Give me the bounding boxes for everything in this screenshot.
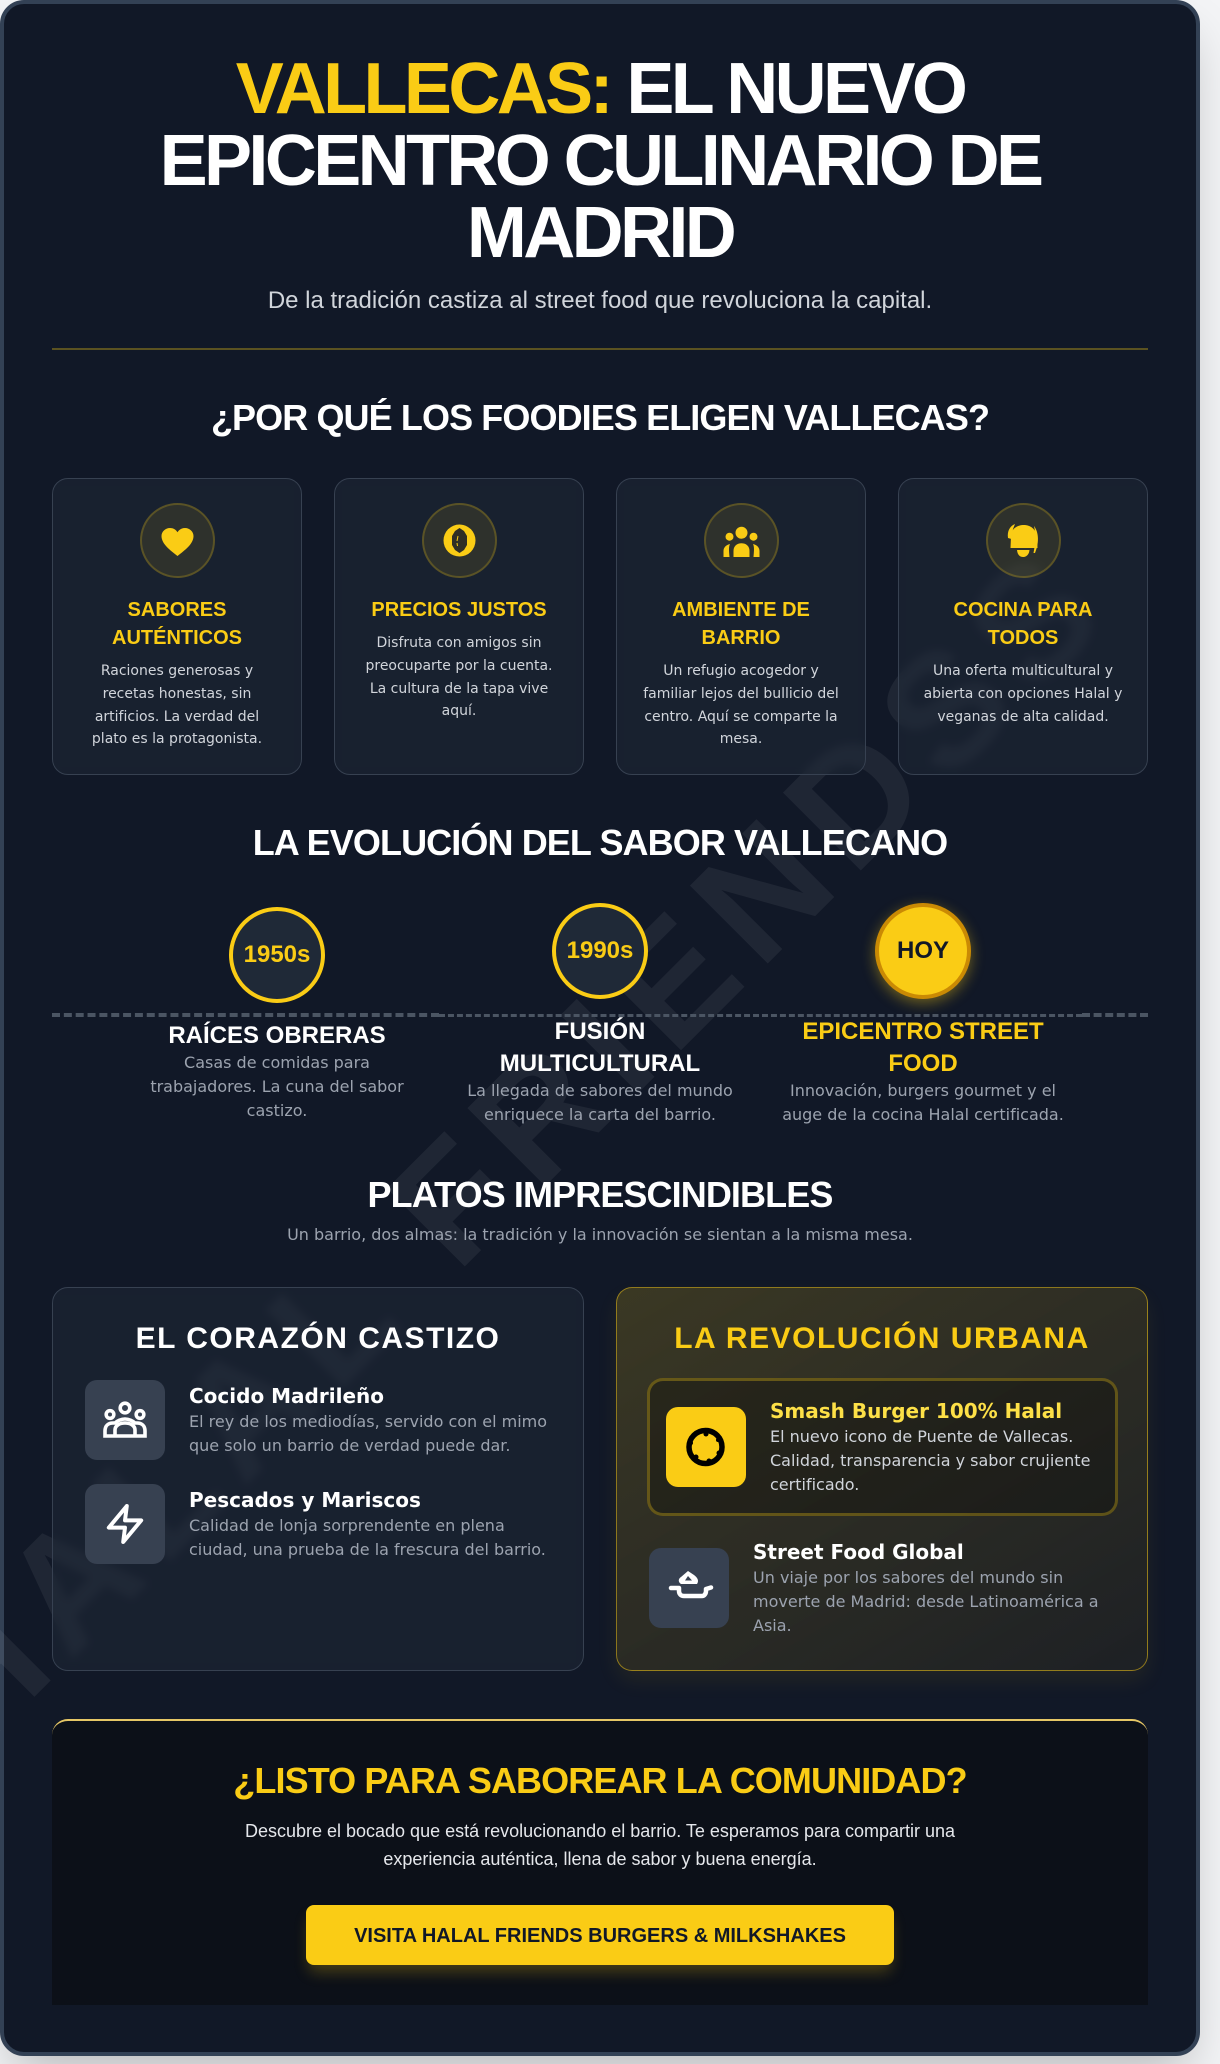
icon: heart <box>140 503 214 578</box>
call to action panel <box>52 1719 1148 2005</box>
title: VALLECAS: EL NUEVO <box>236 49 964 129</box>
card: cocina para todos: Una oferta multicultural y abierta con opciones Halal y veganas de alta calidad. <box>924 663 1122 724</box>
panel: la revolución urbana: LA REVOLUCIÓN URBANA <box>674 1322 1090 1355</box>
timeline node: 1990s <box>552 903 648 999</box>
cta heading: ¿LISTO PARA SABOREAR LA COMUNIDAD? <box>233 1760 967 1801</box>
panel: el corazón castizo <box>52 1287 584 1671</box>
timeline node: hoy <box>875 903 971 999</box>
dish: pescados y mariscos: Calidad de lonja sorprendente en plena ciudad, una prueba de la frescura del barrio. <box>189 1516 546 1559</box>
dish: cocido madrileño: El rey de los mediodías, servido con el mimo que solo un barrio de verdad puede dar. <box>189 1412 547 1455</box>
timeline step: fusión multicultural: FUSIÓN MULTICULTURAL <box>500 1018 700 1077</box>
title: MADRID <box>467 193 733 273</box>
timeline step: fusión multicultural: La llegada de sabores del mundo enriquece la carta del barrio. <box>467 1081 733 1124</box>
card: precios justos <box>334 478 584 775</box>
heading: essential dishes: PLATOS IMPRESCINDIBLES <box>368 1174 832 1215</box>
timeline step: raíces obreras: Casas de comidas para trabajadores. La cuna del sabor castizo. <box>150 1053 404 1120</box>
subtitle: De la tradición castiza al street food que revoluciona la capital. <box>268 287 932 314</box>
timeline step: fusión multicultural <box>467 1017 733 1124</box>
panel: el corazón castizo: EL CORAZÓN CASTIZO <box>136 1322 500 1355</box>
card: cocina para todos: COCINA PARA TODOS <box>954 599 1092 649</box>
title: EPICENTRO CULINARIO DE <box>160 121 1040 201</box>
timeline step: raíces obreras: RAÍCES OBRERAS <box>168 1022 386 1049</box>
featured dish box <box>647 1378 1118 1516</box>
timeline node: hoy: HOY <box>897 937 949 964</box>
panel: la revolución urbana <box>616 1287 1148 1671</box>
cta text: Descubre el bocado que está revolucionando el barrio. Te esperamos para compartir una experiencia auténtica, llena de sabor y buena energía. <box>245 1821 955 1869</box>
dish: street food global: Street Food Global <box>753 1540 964 1564</box>
card: cocina para todos <box>898 478 1148 775</box>
card: ambiente de barrio: Un refugio acogedor y familiar lejos del bullicio del centro. Aquí se comparte la mesa. <box>643 663 839 747</box>
dish: cocido madrileño <box>189 1384 547 1455</box>
dish: cocido madrileño: Cocido Madrileño <box>189 1384 384 1408</box>
timeline node: 1950s <box>229 907 325 1003</box>
timeline step: epicentro street food <box>782 1018 1064 1124</box>
card: ambiente de barrio <box>616 478 866 775</box>
cta button: VISITA HALAL FRIENDS BURGERS & MILKSHAKES <box>354 1925 846 1947</box>
icon: bell <box>986 503 1060 578</box>
card: sabores auténticos: Raciones generosas y recetas honestas, sin artificios. La verdad del plato es la protagonista. <box>92 663 262 747</box>
dish: pescados y mariscos: Pescados y Mariscos <box>189 1488 421 1512</box>
card: precios justos: PRECIOS JUSTOS <box>371 599 547 621</box>
card: sabores auténticos <box>52 478 302 775</box>
dish: smash burger: Smash Burger 100% Halal <box>770 1399 1062 1423</box>
icon: bolt <box>85 1484 165 1564</box>
icon: people <box>704 503 778 578</box>
card: precios justos: Disfruta con amigos sin preocuparte por la cuenta. La cultura de la tapa vive aquí. <box>365 635 552 719</box>
icon: street food pot <box>649 1548 729 1628</box>
dish: smash burger: El nuevo icono de Puente de Vallecas. Calidad, transparencia y sabor crujiente certificado. <box>770 1427 1090 1494</box>
heading: evolution: LA EVOLUCIÓN DEL SABOR VALLECANO <box>253 822 947 863</box>
icon: cocido people <box>85 1380 165 1460</box>
cta button <box>306 1905 894 1965</box>
timeline node: 1950s: 1950s <box>244 941 310 968</box>
dish: street food global: Un viaje por los sabores del mundo sin moverte de Madrid: desde Latinoamérica a Asia. <box>753 1568 1099 1635</box>
dishes subtitle: Un barrio, dos almas: la tradición y la innovación se sientan a la misma mesa. <box>287 1225 913 1244</box>
timeline step: epicentro street food: Innovación, burgers gourmet y el auge de la cocina Halal certificada. <box>782 1081 1064 1124</box>
card: ambiente de barrio: AMBIENTE DE BARRIO <box>672 599 810 649</box>
timeline node: 1990s: 1990s <box>567 937 633 964</box>
timeline step: raíces obreras <box>150 1022 404 1120</box>
icon: burger ring <box>666 1407 746 1487</box>
timeline step: epicentro street food: EPICENTRO STREET FOOD <box>802 1018 1044 1077</box>
icon: coin <box>422 503 496 578</box>
heading: why foodies choose Vallecas: ¿POR QUÉ LOS FOODIES ELIGEN VALLECAS? <box>211 397 989 438</box>
title <box>160 49 1042 273</box>
card: sabores auténticos: SABORES AUTÉNTICOS <box>112 599 242 649</box>
dish: pescados y mariscos <box>189 1488 546 1559</box>
